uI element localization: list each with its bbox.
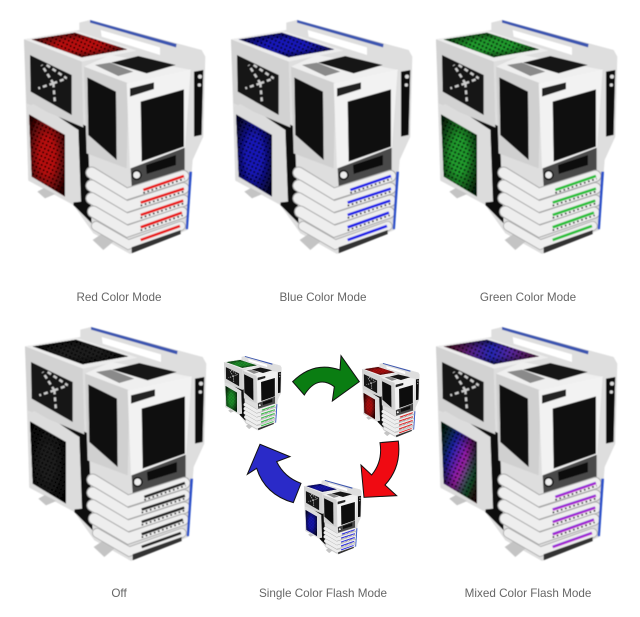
arrow: blue xyxy=(247,444,301,503)
mini case: blue xyxy=(304,480,362,554)
arrow: red xyxy=(361,441,399,497)
diagram: single color flash cycle xyxy=(224,356,420,554)
label: single color flash mode: Single Color Flash Mode xyxy=(259,587,387,600)
case: red color mode xyxy=(24,20,205,254)
mini case: green xyxy=(224,356,282,430)
label: blue color mode: Blue Color Mode xyxy=(279,291,367,304)
case: mixed color flash mode xyxy=(436,327,617,561)
label: red color mode: Red Color Mode xyxy=(76,291,162,304)
label: off: Off xyxy=(111,587,127,600)
label: green color mode: Green Color Mode xyxy=(480,291,576,304)
case: blue color mode xyxy=(231,20,412,254)
arrow: green xyxy=(293,356,359,401)
case: off xyxy=(25,327,206,561)
mini case: red xyxy=(362,363,420,437)
label: mixed color flash mode: Mixed Color Flash Mode xyxy=(465,587,591,600)
case: green color mode xyxy=(436,20,617,254)
